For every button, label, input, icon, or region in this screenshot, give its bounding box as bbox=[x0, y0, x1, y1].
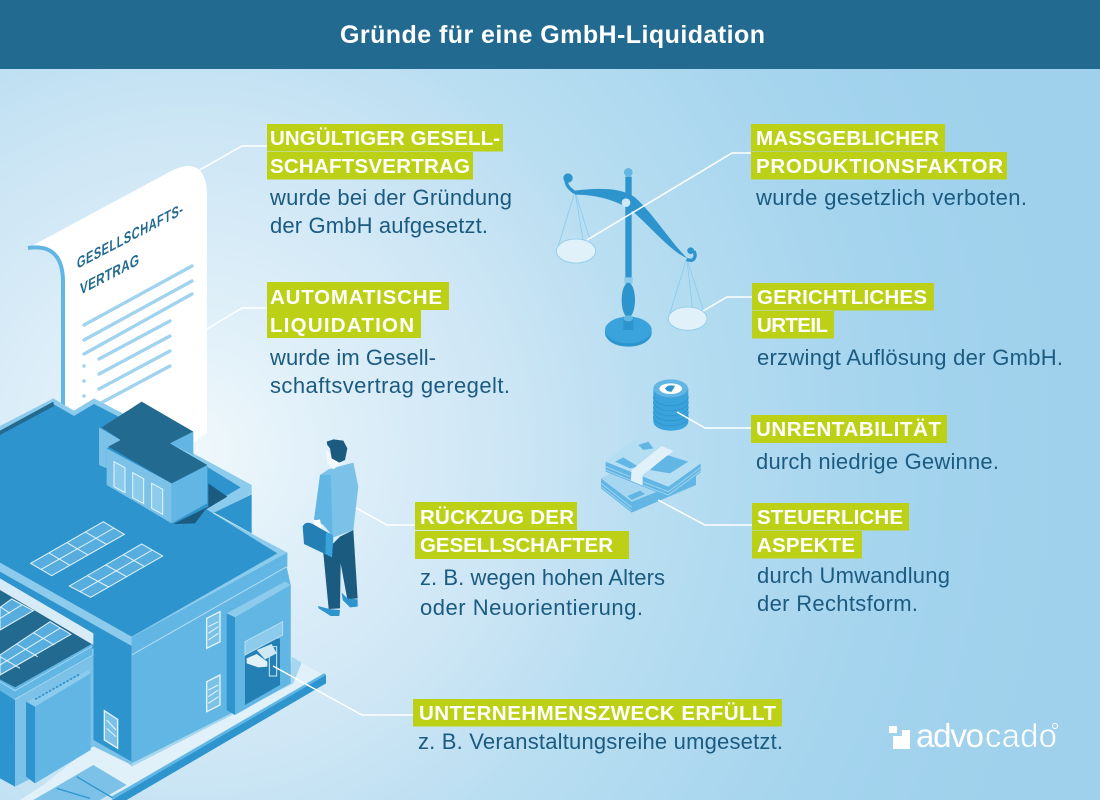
icon: contract document: GESELLSCHAFTS- bbox=[77, 200, 183, 273]
roof parapet bbox=[0, 398, 287, 647]
callout: gerichtliches Urteil: erzwingt Auflösung der GmbH. bbox=[757, 345, 1063, 370]
building: wall windows bbox=[104, 612, 220, 748]
callout: Rückzug der Gesellschafter: z. B. wegen hohen Alters bbox=[420, 565, 665, 590]
callout: Rückzug der Gesellschafter: GESELLSCHAFTER bbox=[420, 534, 613, 557]
logo: advocado: advo bbox=[916, 717, 984, 754]
callout: Unternehmenszweck erfüllt: z. B. Veranstaltungsreihe umgesetzt. bbox=[418, 729, 783, 754]
building: lower left wing bbox=[0, 590, 93, 787]
logo: advocado: cado bbox=[985, 717, 1057, 754]
callout: Unrentabilität: UNRENTABILITÄT bbox=[756, 418, 941, 441]
callout: Unternehmenszweck erfüllt: UNTERNEHMENSZWECK ERFÜLLT bbox=[419, 702, 776, 725]
icon: money bundles bbox=[601, 438, 701, 513]
callout: gerichtliches Urteil: GERICHTLICHES bbox=[757, 286, 927, 309]
callout: automatische Liquidation: wurde im Gesell- bbox=[269, 345, 436, 370]
callout: steuerliche Aspekte: der Rechtsform. bbox=[757, 591, 918, 616]
callout: steuerliche Aspekte: ASPEKTE bbox=[757, 534, 855, 557]
callout: Unrentabilität bbox=[751, 415, 999, 474]
callout: steuerliche Aspekte: durch Umwandlung bbox=[757, 563, 950, 588]
icon: balance scale bbox=[556, 168, 707, 347]
callout: steuerliche Aspekte: STEUERLICHE bbox=[757, 506, 903, 529]
callout: ungültiger Gesellschaftsvertrag: SCHAFTSVERTRAG bbox=[270, 155, 470, 178]
callout: maßgeblicher Produktionsfaktor: wurde gesetzlich verboten. bbox=[755, 185, 1027, 210]
roof notch shadow bbox=[173, 483, 227, 524]
callout: automatische Liquidation bbox=[267, 282, 510, 398]
icon: contract document bbox=[28, 166, 207, 445]
callout: Unrentabilität: durch niedrige Gewinne. bbox=[756, 449, 999, 474]
icon: contract document: VERTRAG bbox=[80, 251, 139, 299]
callout: Rückzug der Gesellschafter bbox=[415, 502, 665, 620]
callout: gerichtliches Urteil bbox=[752, 283, 1063, 370]
icon: coin stack bbox=[653, 379, 688, 431]
logo: advocado bbox=[889, 717, 1058, 754]
rooftop penthouse bbox=[99, 402, 207, 523]
callout: automatische Liquidation: LIQUIDATION bbox=[270, 314, 414, 337]
roof skylights bbox=[31, 522, 163, 597]
callout: Rückzug der Gesellschafter: RÜCKZUG DER bbox=[420, 506, 574, 529]
callout: ungültiger Gesellschaftsvertrag bbox=[267, 124, 512, 238]
callout: maßgeblicher Produktionsfaktor: PRODUKTIONSFAKTOR bbox=[756, 155, 1003, 178]
callout: ungültiger Gesellschaftsvertrag: wurde bei der Gründung bbox=[269, 185, 512, 210]
callout: automatische Liquidation: schaftsvertrag geregelt. bbox=[270, 373, 510, 398]
header bar bbox=[0, 0, 1100, 69]
sidewalk bbox=[20, 657, 326, 800]
roof surface bbox=[0, 404, 277, 637]
connector lines bbox=[196, 146, 752, 715]
callout: Rückzug der Gesellschafter: oder Neuorientierung. bbox=[420, 595, 643, 620]
title: Gründe für eine GmbH-Liquidation bbox=[340, 21, 765, 49]
callout: steuerliche Aspekte bbox=[752, 503, 950, 616]
callout: gerichtliches Urteil: URTEIL bbox=[757, 314, 828, 337]
callout: ungültiger Gesellschaftsvertrag: der GmbH aufgesetzt. bbox=[270, 213, 488, 238]
entrance door bbox=[227, 582, 291, 715]
icon: isometric company building bbox=[0, 398, 326, 800]
callout: Unternehmenszweck erfüllt bbox=[413, 699, 783, 754]
callout: maßgeblicher Produktionsfaktor bbox=[751, 124, 1027, 210]
building: right wall bbox=[132, 567, 291, 763]
icon: person with briefcase bbox=[303, 439, 358, 616]
callout: automatische Liquidation: AUTOMATISCHE bbox=[270, 286, 442, 309]
callout: maßgeblicher Produktionsfaktor: MASSGEBLICHER bbox=[756, 127, 939, 150]
building: left wall bbox=[93, 633, 132, 763]
callout: ungültiger Gesellschaftsvertrag: UNGÜLTIGER GESELL- bbox=[270, 127, 500, 150]
